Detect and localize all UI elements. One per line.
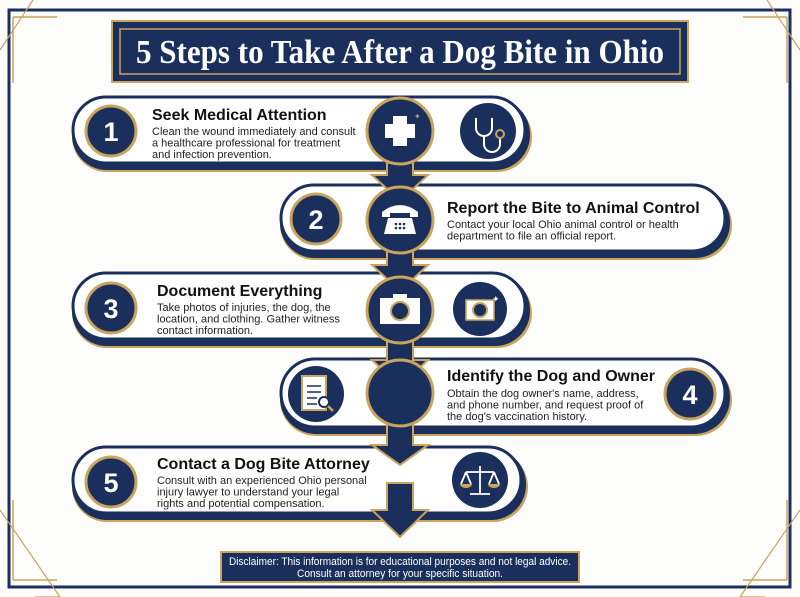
text: step 2 bbox=[447, 200, 700, 242]
text: step 1: a healthcare professional for treatment bbox=[152, 138, 340, 150]
text: step 5: rights and potential compensation. bbox=[157, 498, 325, 510]
text: step 4 bbox=[447, 368, 655, 423]
panel: step 1 bbox=[72, 97, 532, 172]
text: step 5: Contact a Dog Bite Attorney bbox=[157, 456, 370, 473]
disclaimer: Disclaimer: This information is for educational purposes and not legal advice. bbox=[229, 556, 571, 568]
text: step 2: department to file an official report. bbox=[447, 230, 616, 242]
icon: clipboard bbox=[288, 366, 344, 422]
icon: camera bbox=[453, 282, 507, 336]
panel: step 4 bbox=[280, 359, 732, 436]
text: step 5 bbox=[157, 456, 370, 510]
number 3: 3 bbox=[103, 294, 119, 324]
number 4 bbox=[665, 369, 715, 419]
text: step 3: Document Everything bbox=[157, 283, 322, 300]
icon: camera: ✦ bbox=[492, 294, 500, 304]
icon: medical cross: ✦ bbox=[414, 112, 421, 121]
text: step 1: and infection prevention. bbox=[152, 149, 272, 161]
text: step 4: Identify the Dog and Owner bbox=[447, 368, 655, 385]
icon: stethoscope bbox=[460, 103, 516, 159]
text: step 4: and phone number, and request proof of bbox=[447, 400, 644, 412]
panel: step 2 bbox=[280, 185, 732, 260]
icon: camera central bbox=[367, 277, 433, 343]
text: step 3: Take photos of injuries, the dog, the bbox=[157, 302, 331, 314]
text: step 2: Report the Bite to Animal Control bbox=[447, 200, 700, 217]
text: step 5: injury lawyer to understand your legal bbox=[157, 486, 339, 498]
number 5 bbox=[86, 457, 136, 507]
text: step 3 bbox=[157, 283, 340, 337]
title: 5 Steps to Take After a Dog Bite in Ohio bbox=[136, 34, 664, 71]
text: step 1: Clean the wound immediately and consult bbox=[152, 126, 356, 138]
text: step 3: location, and clothing. Gather witness bbox=[157, 314, 340, 326]
text: step 1: Seek Medical Attention bbox=[152, 107, 327, 124]
text: step 4: the dog's vaccination history. bbox=[447, 411, 587, 423]
text: step 2: Contact your local Ohio animal control or health bbox=[447, 219, 679, 231]
disclaimer: Consult an attorney for your specific situation. bbox=[297, 568, 503, 580]
number 4: 4 bbox=[682, 380, 698, 410]
icon: telephone bbox=[367, 187, 433, 253]
number 1 bbox=[86, 106, 136, 156]
disclaimer bbox=[221, 552, 579, 582]
arrows: central flow bbox=[372, 155, 428, 537]
text: step 4: Obtain the dog owner's name, address, bbox=[447, 388, 639, 400]
text: step 5: Consult with an experienced Ohio personal bbox=[157, 475, 367, 487]
icon: scales bbox=[452, 452, 508, 508]
number 2: 2 bbox=[308, 205, 324, 235]
icon: medical cross bbox=[367, 98, 433, 164]
text: step 1 bbox=[152, 107, 356, 161]
central circle step 4 bbox=[367, 360, 433, 426]
number 3 bbox=[86, 283, 136, 333]
title bbox=[112, 21, 688, 82]
number 2 bbox=[291, 194, 341, 244]
panel: step 5 bbox=[72, 447, 528, 522]
number 5: 5 bbox=[103, 468, 119, 498]
number 1: 1 bbox=[103, 117, 119, 147]
panel: step 3 bbox=[72, 273, 532, 348]
text: step 3: contact information. bbox=[157, 325, 253, 337]
